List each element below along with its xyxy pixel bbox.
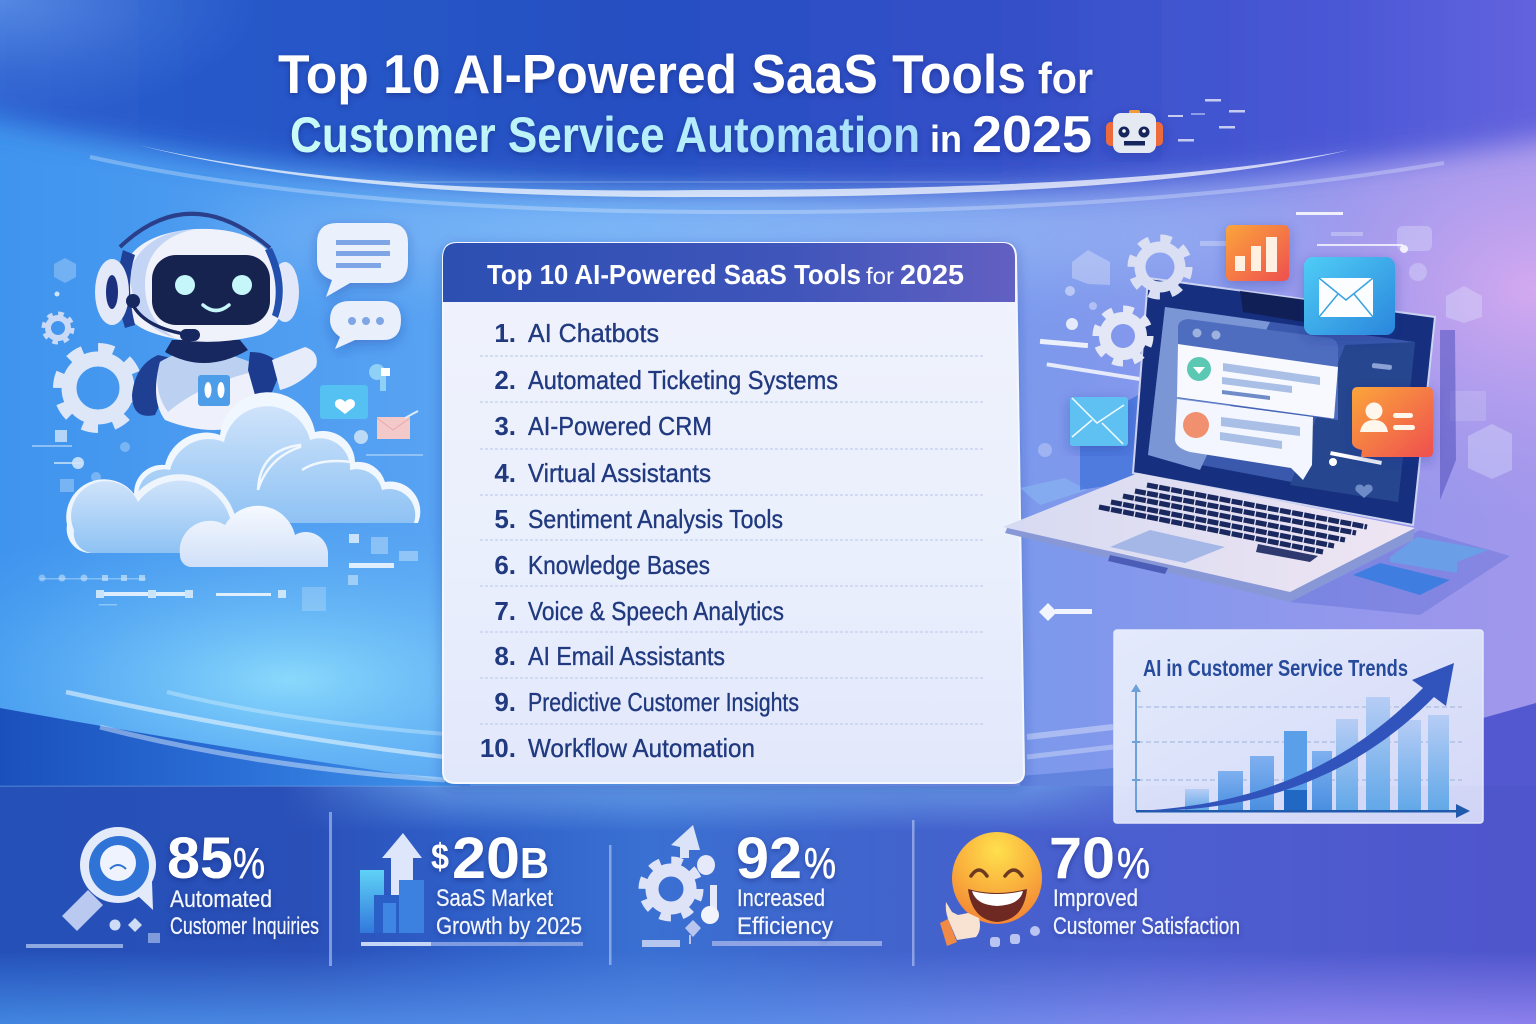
panel header: 2025 <box>900 259 964 290</box>
stat: 92% increased efficiency <box>642 825 882 947</box>
chart bars <box>1185 697 1449 810</box>
stat label: Customer Inquiries <box>170 913 319 940</box>
stat label <box>436 885 582 940</box>
stat value <box>736 826 836 891</box>
stat label: Growth by 2025 <box>436 913 582 940</box>
icon: orange contact bubble <box>1352 387 1433 457</box>
stat label: Increased <box>737 885 825 912</box>
robot body <box>132 340 317 430</box>
panel header: Top 10 AI-Powered SaaS Tools <box>487 259 861 290</box>
stat label <box>1053 885 1240 940</box>
stat dividers <box>329 812 914 966</box>
chat card on screen <box>1175 319 1392 498</box>
icon: gear top <box>1132 239 1188 295</box>
list item 2: Automated Ticketing Systems <box>528 365 838 395</box>
speech bubble with dots <box>330 301 401 349</box>
icon: gear lower <box>1097 310 1149 362</box>
list item 9: 9. <box>494 687 516 717</box>
stat value <box>167 826 265 891</box>
icon: large gear left <box>59 349 137 427</box>
list item 1: AI Chatbots <box>528 318 659 348</box>
icon: blue mail tile <box>1304 257 1395 335</box>
stat label <box>737 885 833 940</box>
stat value: 70 <box>1049 826 1115 891</box>
title: in <box>930 119 962 161</box>
stat value: % <box>804 839 836 888</box>
list item 10: Workflow Automation <box>528 733 755 763</box>
laptop base and keyboard <box>1003 473 1415 602</box>
list item 3: AI-Powered CRM <box>528 411 712 441</box>
panel header: for <box>866 263 894 289</box>
stat value: 92 <box>736 826 802 891</box>
list item 7: 7. <box>494 596 516 626</box>
stat label: Efficiency <box>737 913 833 940</box>
illustration: robot with clouds <box>32 214 423 611</box>
stat value: $ <box>431 836 449 877</box>
panel header <box>443 243 1015 302</box>
stat value: B <box>520 839 549 888</box>
title: Top 10 AI-Powered SaaS Tools <box>278 43 1026 105</box>
stat label: Improved <box>1053 885 1138 912</box>
list item 7: Voice & Speech Analytics <box>528 596 784 626</box>
stat: 70% improved customer satisfaction <box>940 826 1240 947</box>
title: 2025 <box>972 106 1092 164</box>
chart axes <box>1131 684 1470 818</box>
speech bubble with lines <box>317 223 408 297</box>
title: Customer Service Automation <box>290 107 920 163</box>
stat value: % <box>233 839 265 888</box>
list item 10: 10. <box>480 733 516 763</box>
icon: pink mail <box>377 411 418 439</box>
icon: small gear left <box>44 314 72 342</box>
stat: $20B SaaS market growth <box>360 826 583 946</box>
robot head <box>95 214 299 342</box>
stat label: SaaS Market <box>436 885 553 912</box>
stat label: Automated <box>170 886 272 913</box>
stat value: % <box>1117 839 1150 888</box>
icon: left mail tile <box>1070 397 1128 446</box>
icon: orange chart tile <box>1226 225 1289 281</box>
laptop lid <box>1133 278 1435 525</box>
icon: magnifier <box>26 827 160 948</box>
list item 6: Knowledge Bases <box>528 550 710 580</box>
list item 5: 5. <box>494 504 516 534</box>
decorative data lines <box>38 454 423 611</box>
list item 9: Predictive Customer Insights <box>528 687 799 717</box>
decorative light swooshes <box>66 145 1444 780</box>
stat: 85% automated customer inquiries <box>26 826 319 948</box>
icon: title robot <box>1106 110 1163 153</box>
list item 3: 3. <box>494 411 516 441</box>
chart title: AI in Customer Service Trends <box>1143 655 1408 681</box>
shadow blocks <box>1080 330 1510 615</box>
title <box>278 43 1093 164</box>
list item 4: 4. <box>494 458 516 488</box>
list item 2: 2. <box>494 365 516 395</box>
stat value <box>431 826 549 891</box>
icon: smiling emoji with thumb <box>940 832 1042 947</box>
title: for <box>1038 54 1093 103</box>
icon: gear with arrow <box>642 825 882 947</box>
stat value: 20 <box>452 826 520 891</box>
decorative marker <box>1039 603 1092 621</box>
list item 1: 1. <box>494 318 516 348</box>
icon: small connector nodes <box>354 364 390 444</box>
list item 5: Sentiment Analysis Tools <box>528 504 783 534</box>
chart trend arrow <box>1137 663 1454 811</box>
illustration: laptop <box>1003 212 1512 621</box>
clouds <box>66 392 420 567</box>
stat label: Customer Satisfaction <box>1053 913 1240 940</box>
panel: tools list <box>443 243 1024 783</box>
list item 4: Virtual Assistants <box>528 458 711 488</box>
list item 8: 8. <box>494 641 516 671</box>
icon: growth bars with arrow <box>360 833 583 946</box>
background shapes right <box>1020 212 1512 505</box>
list item 8: AI Email Assistants <box>528 641 725 671</box>
stat label <box>170 886 319 940</box>
chart: AI in customer service trends <box>1114 630 1483 823</box>
list item 6: 6. <box>494 550 516 580</box>
stat value <box>1049 826 1150 891</box>
icon: heart card <box>320 385 368 419</box>
decorative dashes by title <box>1168 99 1245 142</box>
background tech marks left <box>32 258 130 492</box>
stat value: 85 <box>167 826 233 891</box>
